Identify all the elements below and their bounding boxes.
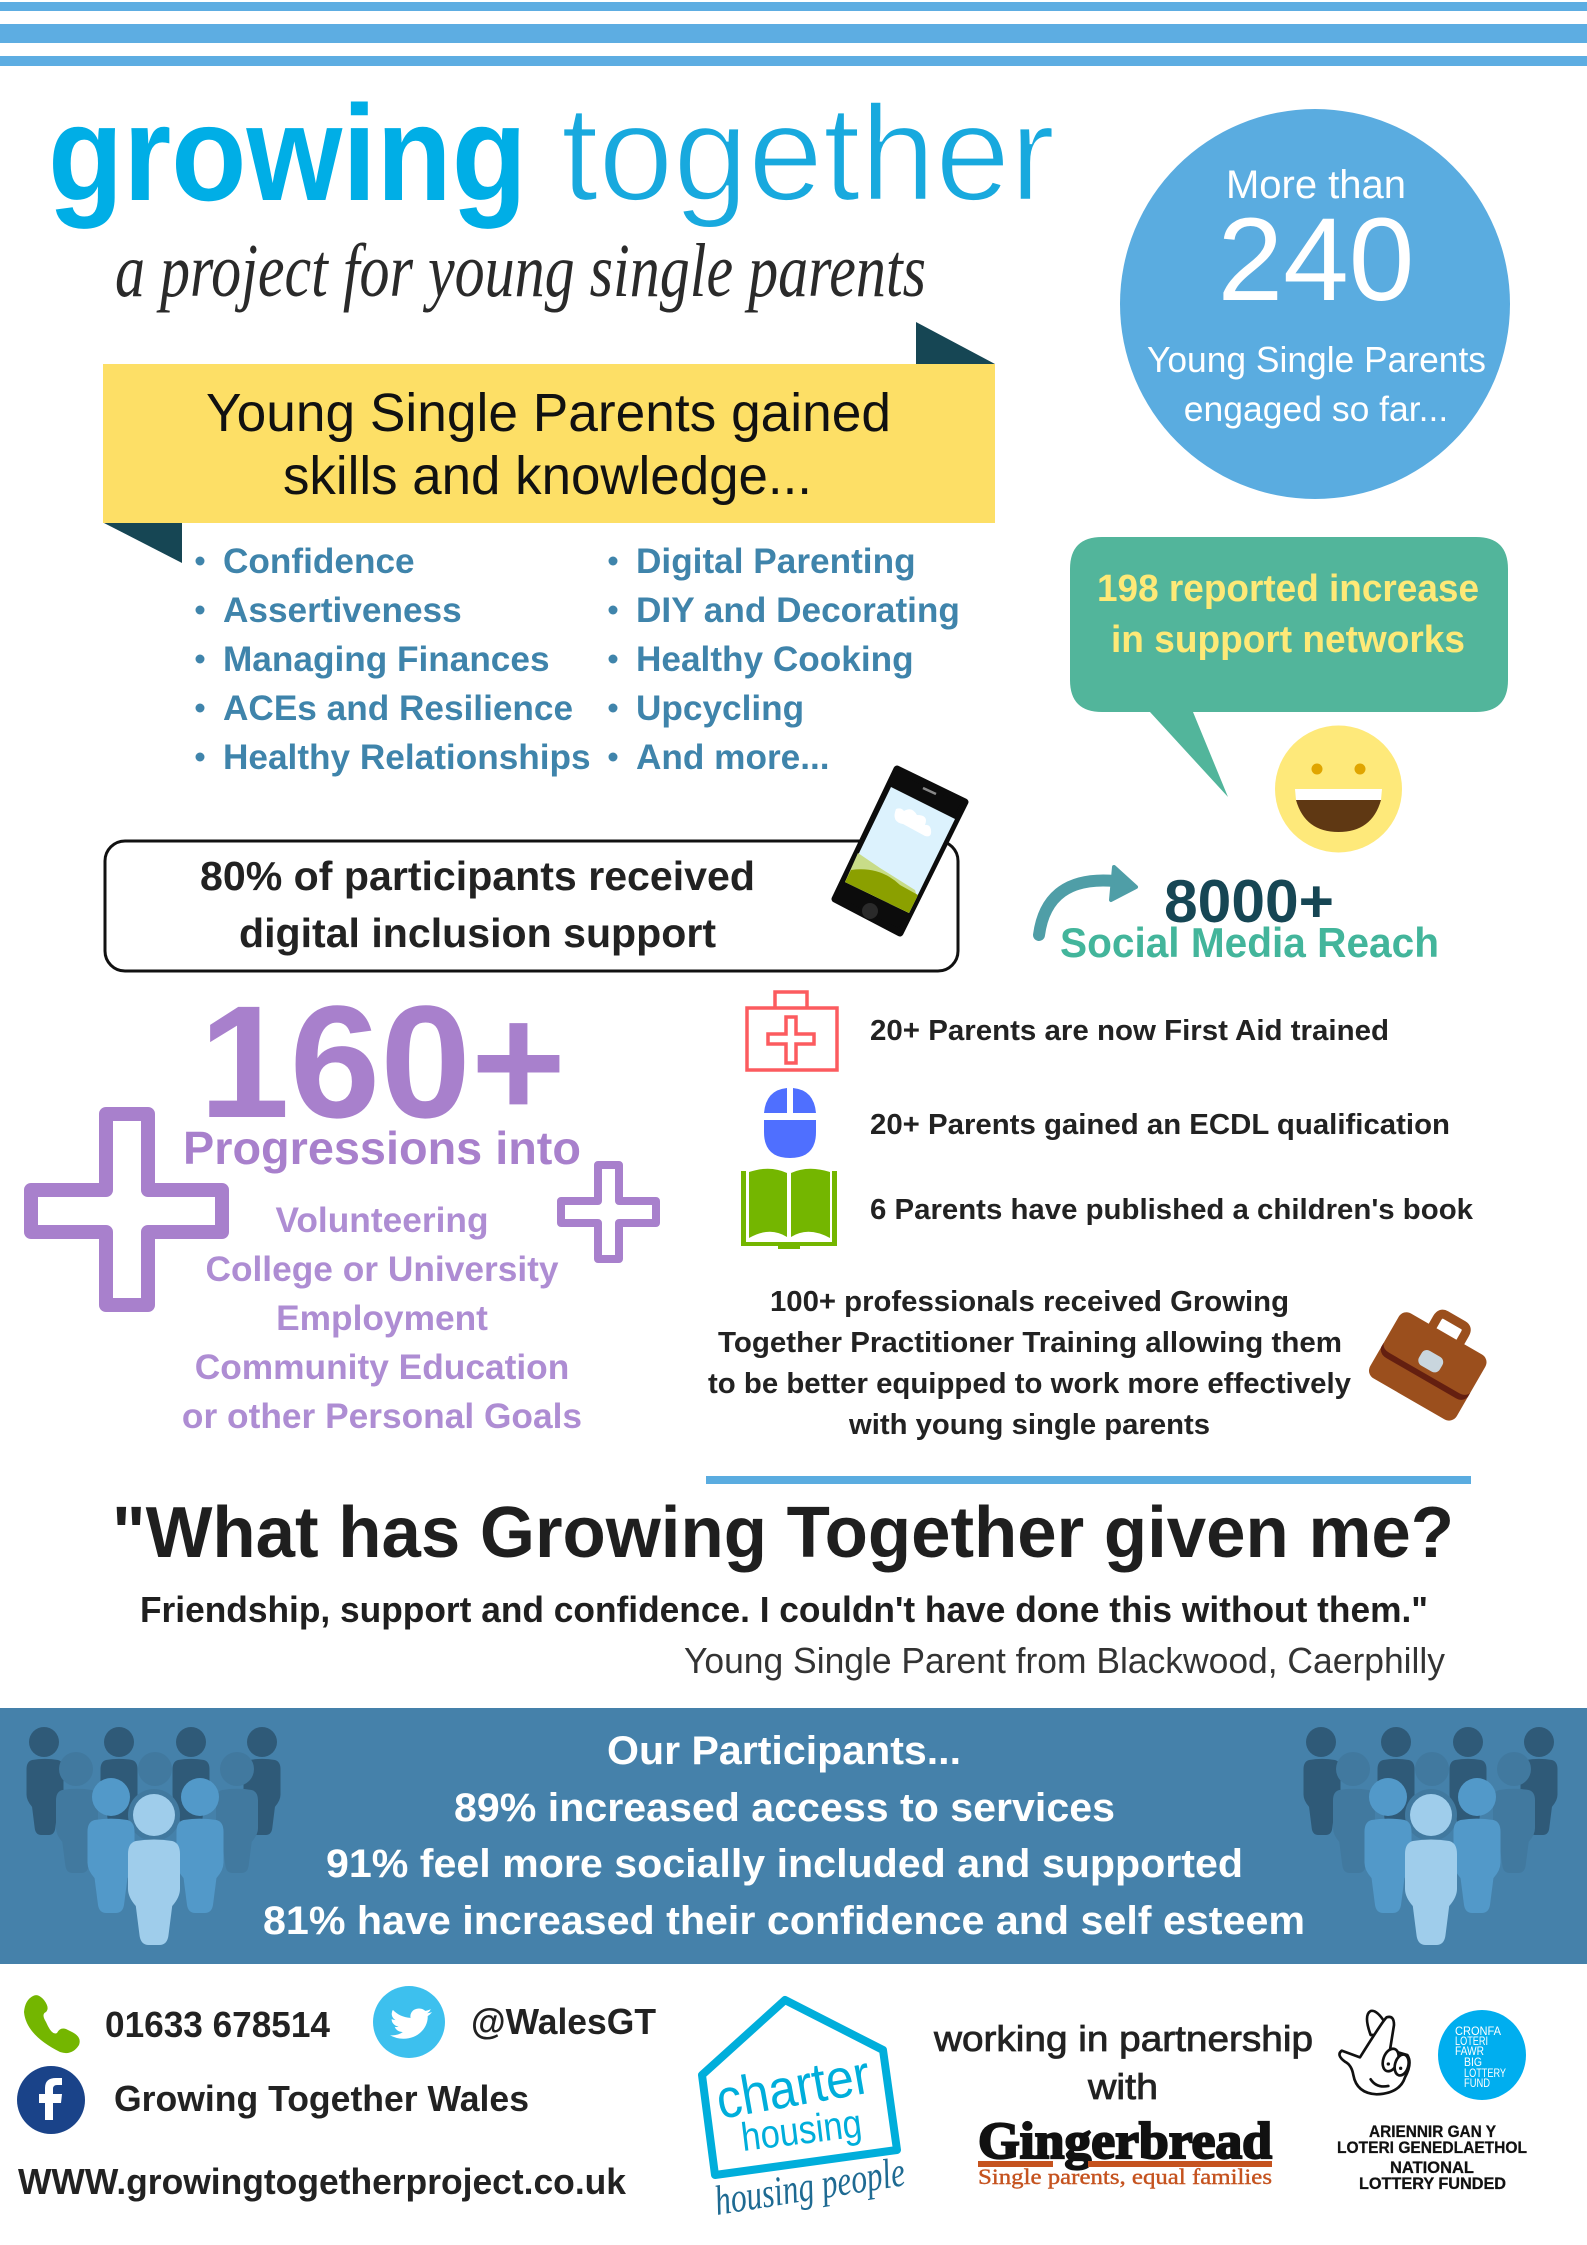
- quote: Friendship, support and confidence. I couldn't have done this without them.": [140, 1589, 1428, 1630]
- professionals training text: 100+ professionals received Growing: [770, 1286, 1289, 1318]
- callout box: digital inclusion: [105, 841, 958, 971]
- lottery funded text: ARIENNIR GAN Y: [1369, 2122, 1497, 2141]
- logo: national lottery hand: [1339, 2011, 1411, 2094]
- icon: telephone: [24, 1995, 80, 2053]
- progressions list: Volunteering: [275, 1201, 489, 1240]
- lottery funded text: [1337, 2122, 1527, 2193]
- logo: big lottery fund circle: LOTERI: [1455, 2034, 1488, 2048]
- stat circle: more than 240 young single parents: More than: [1226, 163, 1406, 207]
- callout box: digital inclusion: 80% of participants received: [200, 853, 755, 899]
- title: growing together logo: [48, 77, 1055, 229]
- logo: big lottery fund circle: [1438, 2010, 1526, 2100]
- callout box: digital inclusion: digital inclusion support: [239, 910, 716, 956]
- icon: smartphone: [835, 769, 965, 933]
- professionals training text: with young single parents: [848, 1409, 1210, 1441]
- first aid stat: 20+ Parents are now First Aid trained: [870, 1015, 1389, 1047]
- logo: big lottery fund circle: CRONFA: [1455, 2024, 1501, 2038]
- icon: smiley face: [1275, 726, 1402, 852]
- progressions list: Community Education: [195, 1348, 569, 1387]
- stat: 8000+ social media reach: 8000+: [1164, 868, 1334, 935]
- icon: people group right: [1304, 1727, 1558, 1945]
- skills list: left column: [196, 542, 591, 777]
- progressions list: or other Personal Goals: [182, 1397, 582, 1436]
- skills list: right column: And more...: [636, 738, 830, 777]
- speech bubble: support networks: [1070, 537, 1508, 797]
- skills list: right column: Upcycling: [636, 689, 804, 728]
- icon: twitter: [373, 1986, 445, 2058]
- progressions list: [182, 1201, 582, 1436]
- stat: 160+ progressions: Progressions into: [183, 1122, 581, 1174]
- skills list: left column: Healthy Relationships: [223, 738, 591, 777]
- logo: charter housing: [702, 2000, 908, 2225]
- icon: facebook: [17, 2066, 85, 2134]
- icon: people group left: [26, 1727, 280, 1945]
- lottery funded text: LOTERI GENEDLAETHOL: [1337, 2138, 1527, 2157]
- stat circle: more than 240 young single parents: [1120, 109, 1510, 499]
- stat circle: more than 240 young single parents: 240: [1218, 194, 1414, 326]
- quote: "What has Growing Together given me?: [112, 1493, 1454, 1573]
- participants text: Our Participants...: [607, 1729, 961, 1773]
- progressions list: Employment: [276, 1299, 488, 1338]
- title: growing together logo: together: [561, 77, 1055, 229]
- lottery funded text: LOTTERY FUNDED: [1359, 2174, 1506, 2193]
- professionals training text: [708, 1286, 1351, 1441]
- stat circle: more than 240 young single parents: Young Single Parents: [1147, 339, 1486, 380]
- professionals training text: Together Practitioner Training allowing them: [718, 1327, 1342, 1359]
- skills list: right column: Digital Parenting: [636, 542, 916, 581]
- skills list: left column: ACEs and Resilience: [223, 689, 573, 728]
- facebook name: Growing Together Wales: [114, 2078, 529, 2119]
- icon: open book: [741, 1169, 837, 1249]
- skills list: right column: Healthy Cooking: [636, 640, 914, 679]
- phone number: 01633 678514: [105, 2004, 330, 2045]
- yellow ribbon banner: [103, 322, 995, 563]
- panel: our participants band: [0, 1708, 1587, 1964]
- partnership text: with: [1087, 2066, 1158, 2107]
- skills list: right column: [608, 542, 960, 777]
- logo: gingerbread: Single parents, equal families: [978, 2164, 1272, 2189]
- quote: Young Single Parent from Blackwood, Caerphilly: [684, 1640, 1445, 1681]
- logo: charter housing: housing people: [711, 2149, 908, 2225]
- quote: [112, 1493, 1454, 1681]
- subtitle: a project for young single parents: a project for young single parents: [115, 229, 926, 313]
- icon: curved arrow: [1039, 867, 1136, 935]
- icon: computer mouse: [764, 1088, 816, 1158]
- stat: 160+ progressions: 160+: [199, 972, 566, 1151]
- partnership text: [933, 2018, 1313, 2107]
- twitter handle: @WalesGT: [471, 2001, 656, 2042]
- participants text: [263, 1729, 1305, 1943]
- stat: 8000+ social media reach: Social Media Reach: [1060, 919, 1439, 966]
- logo: big lottery fund circle: FUND: [1464, 2076, 1490, 2090]
- skills list: left column: Managing Finances: [223, 640, 550, 679]
- participants text: 89% increased access to services: [454, 1786, 1115, 1830]
- yellow ribbon banner: skills and knowledge...: [283, 446, 812, 506]
- icon: first aid kit: [747, 992, 837, 1070]
- speech bubble: support networks: 198 reported increase: [1097, 568, 1479, 610]
- partnership text: working in partnership: [933, 2018, 1313, 2059]
- website: WWW.growingtogetherproject.co.uk: [18, 2161, 627, 2202]
- skills list: left column: Confidence: [223, 542, 415, 581]
- speech bubble: support networks: in support networks: [1111, 619, 1465, 661]
- icon: small plus outline: [561, 1165, 656, 1259]
- logo: gingerbread: Gingerbread: [978, 2113, 1272, 2170]
- participants text: 81% have increased their confidence and self esteem: [263, 1899, 1305, 1943]
- logo: big lottery fund circle: BIG: [1464, 2055, 1482, 2069]
- logo: big lottery fund circle: LOTTERY: [1464, 2066, 1506, 2080]
- title: growing together logo: growing: [48, 77, 527, 229]
- stat circle: more than 240 young single parents: engaged so far...: [1184, 389, 1448, 429]
- logo: charter housing: housing: [739, 2102, 864, 2160]
- participants text: 91% feel more socially included and supported: [326, 1842, 1243, 1886]
- lottery funded text: NATIONAL: [1390, 2158, 1474, 2177]
- icon: briefcase: [1366, 1295, 1498, 1424]
- professionals training text: to be better equipped to work more effectively: [708, 1368, 1351, 1400]
- book stat: 6 Parents have published a children's book: [870, 1194, 1474, 1226]
- logo: big lottery fund circle: FAWR: [1455, 2044, 1484, 2058]
- stat: 8000+ social media reach: [1060, 868, 1439, 966]
- icon: large plus outline: [31, 1114, 222, 1305]
- skills list: right column: DIY and Decorating: [636, 591, 960, 630]
- ECDL stat: 20+ Parents gained an ECDL qualification: [870, 1109, 1450, 1141]
- progressions list: College or University: [205, 1250, 559, 1289]
- yellow ribbon banner: Young Single Parents gained: [206, 383, 891, 443]
- skills list: left column: Assertiveness: [223, 591, 462, 630]
- logo: charter housing: charter: [711, 2043, 875, 2131]
